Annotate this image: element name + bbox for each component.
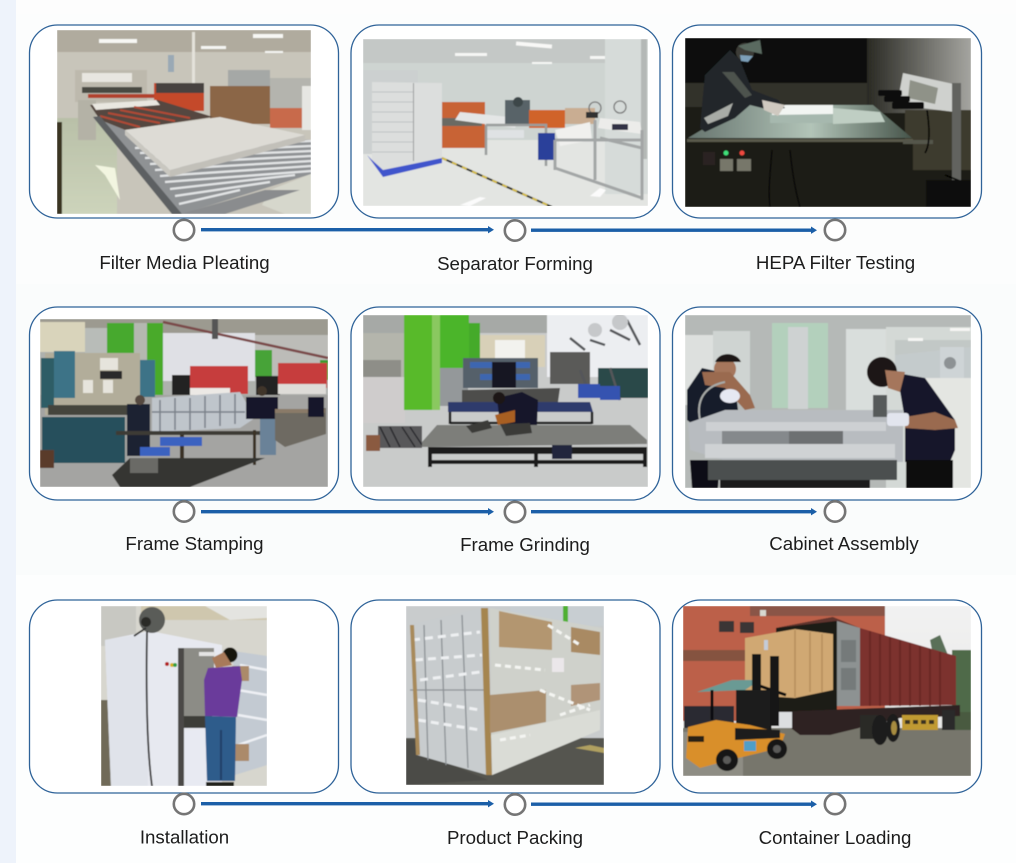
arrow: to Frame Grinding [201, 508, 494, 515]
photo: cabinet assembly [685, 315, 971, 488]
label: Filter Media Pleating [99, 252, 270, 273]
panel: Separator Forming [351, 25, 817, 274]
node: step marker [825, 794, 845, 814]
panel frame [672, 25, 982, 218]
photo: frame stamping workshop [40, 319, 328, 487]
label: Cabinet Assembly [769, 533, 919, 554]
arrow: to Separator Forming [201, 226, 494, 233]
arrow: to HEPA Filter Testing [531, 226, 817, 234]
panel frame [30, 25, 338, 218]
panel frame [351, 600, 660, 793]
label: Frame Stamping [125, 533, 264, 554]
label: Frame Grinding [460, 534, 590, 555]
panel: Cabinet Assembly [672, 307, 982, 554]
photo: pleating machine [57, 30, 311, 214]
panel: Frame Stamping [30, 307, 494, 554]
panel: Installation [30, 600, 494, 848]
arrow: to Product Packing [201, 800, 494, 807]
node: step marker [174, 794, 194, 814]
photo: container loading [683, 606, 971, 776]
panel frame [30, 600, 338, 793]
label: Separator Forming [437, 253, 593, 274]
node: step marker [505, 220, 525, 241]
panel frame [672, 307, 982, 500]
label: Container Loading [759, 827, 911, 848]
panel: Frame Grinding [351, 307, 817, 555]
panel: Filter Media Pleating [30, 25, 494, 273]
arrow: to Container Loading [531, 800, 817, 808]
panel frame [30, 307, 338, 500]
panel: Product Packing [351, 600, 817, 848]
arrow: to Cabinet Assembly [531, 508, 817, 515]
node: step marker [174, 501, 194, 522]
label: Product Packing [447, 827, 583, 848]
node: step marker [825, 220, 845, 240]
panel: HEPA Filter Testing [672, 25, 982, 273]
photo: HEPA filter testing [685, 38, 971, 207]
node: step marker [505, 502, 525, 522]
node: step marker [825, 501, 845, 522]
photo: frame grinding workshop [363, 315, 648, 487]
panel: Container Loading [672, 600, 982, 848]
photo: product packing [406, 606, 604, 785]
photo: separator forming line [363, 39, 648, 206]
photo: installation [101, 606, 267, 786]
label: Installation [140, 826, 229, 848]
label: HEPA Filter Testing [756, 252, 915, 273]
panel frame [672, 600, 982, 793]
panel frame [351, 307, 660, 500]
node: step marker [174, 220, 194, 240]
node: step marker [505, 794, 525, 815]
panel frame [351, 25, 660, 218]
